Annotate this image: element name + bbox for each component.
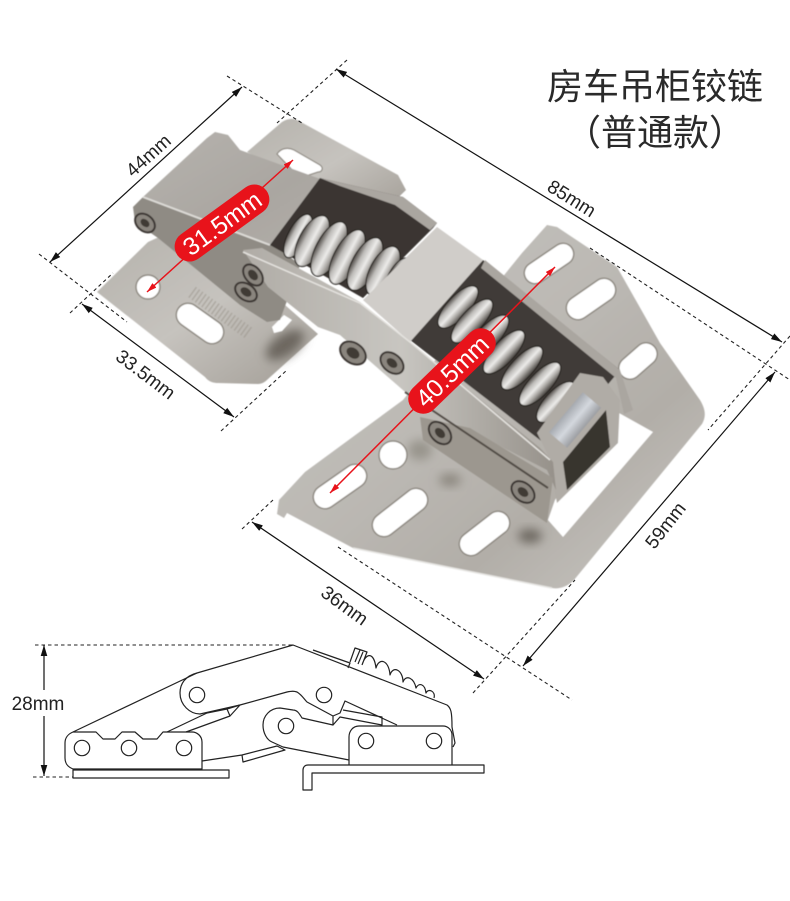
measurement: 31.5mm: 31.5mm (178, 186, 267, 262)
side view line drawing (65, 645, 484, 790)
upper side strip (133, 197, 300, 322)
dimension label: 85mm: 85mm (543, 176, 599, 222)
cover outline (73, 645, 455, 747)
screws (131, 210, 539, 507)
measurement: 40.5mm: 40.5mm (410, 330, 495, 413)
dimension label: 33.5mm: 33.5mm (111, 346, 179, 404)
spring compartment 1 (270, 178, 437, 302)
right bracket (349, 726, 452, 765)
upper arm (180, 673, 349, 760)
inner levers (167, 705, 240, 732)
title: （普通款） (565, 112, 745, 153)
dimension lines (33, 60, 790, 777)
dimension label: 28mm: 28mm (12, 694, 64, 715)
end bracket with roller (537, 373, 620, 503)
measurement: 40.5mm (330, 267, 555, 493)
spring (350, 648, 434, 698)
left base plate (73, 770, 229, 778)
title: 房车吊柜铰链 (547, 66, 763, 107)
measurement: 31.5mm (147, 160, 293, 292)
right base plate (303, 765, 484, 790)
lower lever (243, 248, 556, 523)
dimension label: 36mm: 36mm (317, 582, 372, 630)
right mounting plate (277, 225, 705, 588)
rear top plate (247, 119, 406, 215)
left mounting plate (97, 232, 318, 384)
left base link (65, 732, 202, 769)
upper cover (143, 132, 337, 245)
title (547, 66, 763, 153)
photo: hinge (97, 119, 705, 588)
dimension label: 44mm: 44mm (122, 131, 176, 182)
middle plate (363, 227, 483, 342)
top plate (313, 650, 350, 668)
spring compartment 2 (410, 260, 633, 450)
pivot holes (74, 687, 442, 756)
dimension label: 59mm: 59mm (642, 499, 691, 553)
